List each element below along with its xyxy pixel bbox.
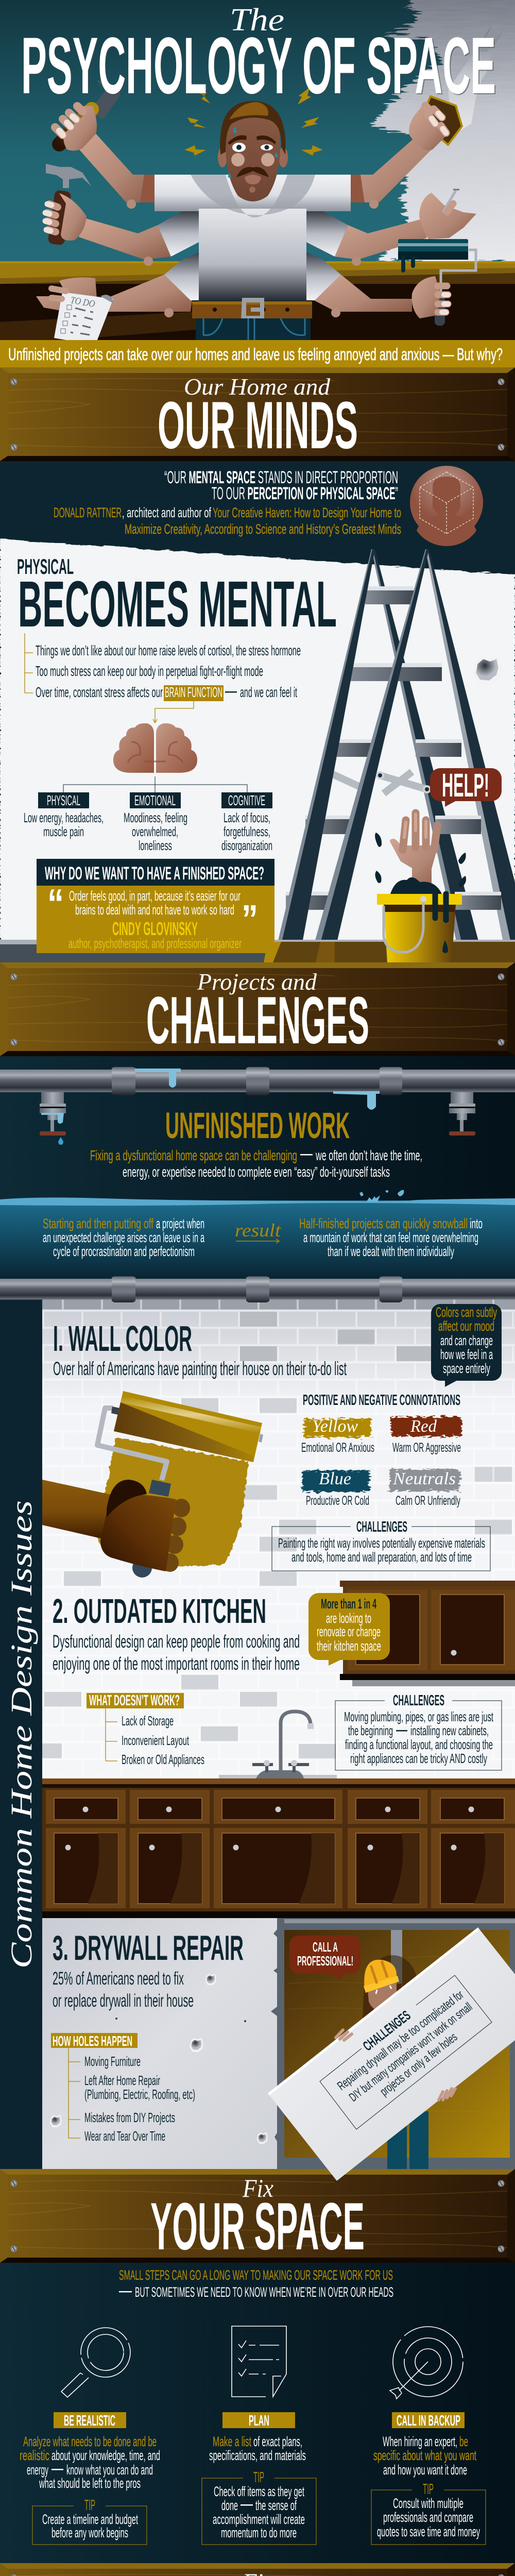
panel: cognitive symptoms: disorganization xyxy=(221,838,272,853)
tip box: the sense of xyxy=(255,2498,297,2513)
swatch: yellow: Yellow xyxy=(312,1417,358,1436)
panel: workbench and floor xyxy=(0,261,515,340)
panel: what doesn't work: Inconvenient Layout xyxy=(122,1733,189,1748)
illustration: ladder xyxy=(273,549,515,962)
step: be realistic xyxy=(20,2328,160,2545)
banner: projects and challenges xyxy=(0,962,515,1058)
panel: emotional symptoms: Moodiness, feeling xyxy=(124,810,187,825)
step: be realistic: about your knowledge, time, and xyxy=(52,2448,160,2463)
callout: call a professional: PROFESSIONAL! xyxy=(297,1953,353,1969)
arrow: result: result xyxy=(235,1220,281,1241)
illustration: to-do list hand: TO DO xyxy=(70,295,96,310)
jeans xyxy=(196,318,311,340)
swatch: yellow: Emotional OR Anxious xyxy=(301,1440,374,1455)
panel: why finished space: WHY DO WE WANT TO HAVE A FINISHED SPACE? xyxy=(45,863,264,884)
panel: drywall repair xyxy=(42,1918,277,2171)
text: right column: into xyxy=(470,1216,483,1231)
swatch: red: Warm OR Aggressive xyxy=(392,1440,461,1455)
illustration: middle left arm with hammer xyxy=(45,164,171,266)
list: stress effects: Over time, constant stress affects our xyxy=(36,684,163,700)
icon: checklist xyxy=(232,2326,286,2397)
swatch: red: Red xyxy=(410,1417,437,1436)
panel: water xyxy=(0,1190,515,1280)
text: drywall stat: 25% of Americans need to fix xyxy=(53,1969,184,1989)
icon: holes in drywall xyxy=(50,1974,268,2144)
tip box xyxy=(32,2497,147,2545)
illustration: upper right arm with saw xyxy=(351,25,502,209)
swatch: neutrals xyxy=(390,1469,460,1508)
quote attribution xyxy=(54,505,401,537)
illustration: drywall board with challenges: CHALLENGES xyxy=(360,2008,414,2054)
tip box: TIP xyxy=(423,2481,434,2498)
swatch: red xyxy=(391,1417,461,1455)
text: drywall stat xyxy=(53,1969,194,2011)
panel: brick wall xyxy=(42,1299,515,1781)
illustration: paint roller hand xyxy=(314,239,476,326)
panel: what doesn't work: WHAT DOESN’T WORK? xyxy=(89,1692,180,1709)
panel: what doesn't work xyxy=(87,1692,204,1767)
text: intro: Fixing a dysfunctional home space can be challenging xyxy=(90,1147,297,1163)
list: how holes happen: HOW HOLES HAPPEN xyxy=(53,2033,132,2049)
panel: kitchen challenges xyxy=(335,1692,502,1770)
painted wall patch xyxy=(95,1437,248,1566)
panel: why finished space: brains to deal with and not have to work so hard xyxy=(75,902,234,918)
panel: kitchen challenges: the beginning xyxy=(348,1723,393,1738)
callout: more than 1 in 4: More than 1 in 4 xyxy=(321,1596,376,1612)
icon: head in a cube xyxy=(410,466,483,546)
banner: fix your mind xyxy=(0,2563,515,2576)
list: how holes happen: Wear and Tear Over Time xyxy=(84,2128,165,2144)
step: plan: PLAN xyxy=(249,2413,269,2429)
callout: more than 1 in 4 xyxy=(308,1593,390,1666)
text: left column: Starting and then putting off xyxy=(43,1216,153,1231)
arm xyxy=(42,1480,113,1539)
step: call in backup xyxy=(371,2327,486,2545)
quote attribution: , architect and author of xyxy=(122,505,211,520)
text: left column: cycle of procrastination and perfectionism xyxy=(53,1244,195,1259)
illustration: paint roller on wall xyxy=(42,1391,263,1578)
icon: magnifying glass xyxy=(61,2328,130,2397)
panel: physical symptoms xyxy=(24,792,104,839)
panel: wall color challenges xyxy=(272,1519,490,1571)
step: call in backup: be xyxy=(459,2434,468,2449)
illustration: drywall board with challenges: projects or only a few holes xyxy=(377,2030,460,2099)
list: how holes happen xyxy=(51,2033,195,2144)
swatch: blue: Productive OR Cold xyxy=(306,1494,369,1508)
step: be realistic: realistic xyxy=(20,2448,49,2463)
list: how holes happen: Left After Home Repair xyxy=(84,2073,160,2088)
panel: cognitive symptoms: forgetfulness, xyxy=(224,824,270,839)
step: plan: specifications, and materials xyxy=(209,2448,306,2463)
illustration: upper kitchen cabinet xyxy=(340,1581,515,1686)
illustration: faucet xyxy=(219,1711,337,1780)
text: small steps xyxy=(119,2267,393,2300)
text: left column xyxy=(43,1216,205,1259)
quote text xyxy=(164,468,398,503)
tip box: Create a timeline and budget xyxy=(42,2512,138,2527)
panel: subtitle bar xyxy=(0,340,515,368)
list: stress effects xyxy=(25,633,301,701)
arrow: brain function to brain xyxy=(153,701,194,723)
icon: target with arrow xyxy=(390,2327,463,2399)
illustration: man's head xyxy=(218,101,288,201)
icon: close quote: ” xyxy=(242,896,258,942)
panel: emotional symptoms: overwhelmed, xyxy=(132,824,178,839)
panel: baseboard xyxy=(0,940,515,963)
banner: our home and our minds: Our Home and xyxy=(184,374,331,400)
ladder brace xyxy=(330,772,427,793)
illustration: to-do list hand xyxy=(36,275,192,345)
illustration: stud wall xyxy=(271,1918,515,2171)
text: intro: we often don’t have the time, xyxy=(315,1147,422,1163)
callout: colors affect mood xyxy=(431,1304,502,1387)
panel: physical symptoms: muscle pain xyxy=(43,824,84,839)
step: be realistic: know what you can do and xyxy=(66,2462,153,2478)
list: how holes happen: (Plumbing, Electric, Roofing, etc) xyxy=(84,2087,195,2102)
callout: more than 1 in 4: renovate or change xyxy=(317,1624,381,1639)
panel: why finished space xyxy=(37,859,274,953)
banner: fix your space: Fix xyxy=(242,2174,273,2202)
panel: header background xyxy=(0,0,515,263)
tip box: before any work begins xyxy=(52,2525,128,2540)
panel: wall color challenges: CHALLENGES xyxy=(356,1519,407,1535)
heading: Physical: PHYSICAL xyxy=(17,554,74,579)
banner: our home and our minds xyxy=(0,367,515,463)
panel: common issues sidebar xyxy=(0,1298,42,2170)
text: right column xyxy=(299,1216,483,1259)
tip box xyxy=(371,2481,486,2545)
illustration: bottom pipe xyxy=(0,1276,515,1302)
list: stress effects: Too much stress can keep our body in perpetual fight-or-flight mode xyxy=(36,663,263,679)
panel: why finished space: author, psychotherapist, and professional organizer xyxy=(68,936,242,951)
text: left column: an unexpected challenge arises can leave us in a xyxy=(43,1230,205,1245)
illustration: right faucet xyxy=(449,1082,475,1136)
callout: help xyxy=(430,767,502,807)
illustration: upper left arm with wrench xyxy=(55,80,154,209)
tip box: momentum to do more xyxy=(221,2525,297,2540)
illustration: worker in hard hat xyxy=(359,1955,428,2171)
illustration: hand sinking in paint bucket xyxy=(375,813,466,962)
step: be realistic: energy xyxy=(27,2462,48,2478)
tip box: done xyxy=(221,2498,238,2513)
panel: common issues sidebar: Common Home Design Issues xyxy=(5,1500,38,1969)
roller head xyxy=(114,1391,262,1462)
list: how holes happen: Moving Furniture xyxy=(84,2054,141,2069)
icon: stress lightning bolts xyxy=(184,88,323,156)
panel: fix your space steps xyxy=(0,2263,515,2564)
chart: effects org lines xyxy=(63,776,247,792)
swatch: yellow xyxy=(301,1417,374,1455)
list: how holes happen: Mistakes from DIY Projects xyxy=(84,2110,175,2125)
tip box: accomplishment will create xyxy=(213,2512,305,2527)
panel: what doesn't work: Broken or Old Appliances xyxy=(122,1752,204,1767)
hands holding board xyxy=(336,2030,455,2100)
panel: cognitive symptoms: Lack of focus, xyxy=(224,810,270,825)
callout: call a professional: CALL A xyxy=(313,1939,338,1955)
tip box: Check off items as they get xyxy=(214,2484,304,2499)
banner: fix your space xyxy=(0,2169,515,2264)
step: be realistic: BE REALISTIC xyxy=(64,2413,115,2429)
panel: unfinished work xyxy=(0,1056,515,1201)
panel: color connotations xyxy=(301,1392,461,1508)
text: intro xyxy=(90,1147,422,1180)
panel: cognitive symptoms xyxy=(221,792,272,853)
list: stress effects: and we can feel it xyxy=(240,684,297,700)
panel: kitchen challenges: CHALLENGES xyxy=(393,1692,444,1709)
step: plan: Make a list xyxy=(213,2434,251,2449)
callout: more than 1 in 4: are looking to xyxy=(326,1611,371,1626)
illustration: lower kitchen cabinets xyxy=(42,1778,515,1918)
text: drywall stat: or replace drywall in their house xyxy=(53,1991,194,2011)
step: be realistic: Analyze what needs to be done and be xyxy=(23,2434,157,2449)
icon: open quote: “ xyxy=(47,880,64,926)
tip box: TIP xyxy=(84,2497,95,2514)
text: left column: a project when xyxy=(156,1216,204,1231)
fist xyxy=(100,1480,190,1572)
banner: projects and challenges: Projects and xyxy=(197,969,317,995)
panel: our minds dark quote area xyxy=(0,461,515,585)
panel: emotional symptoms: loneliness xyxy=(139,838,172,853)
panel: emotional symptoms: EMOTIONAL xyxy=(134,792,176,808)
illustration: stressed man torso xyxy=(154,175,351,340)
heading: outdated kitchen: 2. OUTDATED KITCHEN xyxy=(53,1592,266,1631)
panel: physical symptoms: PHYSICAL xyxy=(47,792,80,808)
text: kitchen description xyxy=(53,1632,300,1674)
panel: cognitive symptoms: COGNITIVE xyxy=(228,792,265,808)
callout: more than 1 in 4: their kitchen space xyxy=(317,1638,381,1654)
illustration: left faucet xyxy=(40,1082,66,1136)
swatch: neutrals: Neutrals xyxy=(392,1469,456,1488)
grip xyxy=(149,1480,171,1497)
step: plan xyxy=(202,2326,316,2545)
text: kitchen description: Dysfunctional design can keep people from cooking and xyxy=(53,1632,300,1652)
step: be realistic: what should be left to the pros xyxy=(39,2476,141,2491)
panel: emotional symptoms xyxy=(124,792,187,853)
illustration: drywall board with challenges xyxy=(268,1927,515,2181)
tip box xyxy=(202,2469,316,2545)
step: plan: of exact plans, xyxy=(253,2434,302,2449)
quote attribution: DONALD RATTNER xyxy=(54,505,122,520)
panel: why finished space: Order feels good, in part, because it’s easier for our xyxy=(69,888,241,904)
list: stress effects: BRAIN FUNCTION xyxy=(165,684,222,700)
belt xyxy=(192,298,312,321)
illustration: middle right arm holding a nail xyxy=(335,190,476,266)
heading: unfinished work: UNFINISHED WORK xyxy=(165,1106,350,1146)
heading: wall color: I. WALL COLOR xyxy=(53,1318,192,1359)
tip box: TIP xyxy=(253,2469,264,2486)
panel: physical becomes mental light area xyxy=(0,539,515,958)
text: kitchen description: enjoying one of the most important rooms in their home xyxy=(53,1654,300,1674)
panel: why finished space: CINDY GLOVINSKY xyxy=(112,918,198,939)
heading: drywall repair: 3. DRYWALL REPAIR xyxy=(53,1928,244,1968)
roller frame xyxy=(97,1408,167,1480)
illustration: top pipe xyxy=(0,1067,515,1095)
icon: brain xyxy=(113,723,197,773)
panel: physical symptoms: Low energy, headaches, xyxy=(24,810,104,825)
illustration: hole in wall xyxy=(473,654,502,685)
panel: what doesn't work: Lack of Storage xyxy=(122,1713,174,1728)
callout: call a professional xyxy=(289,1936,360,1979)
swatch: neutrals: Calm OR Unfriendly xyxy=(396,1494,460,1508)
title: The: The xyxy=(230,3,284,38)
swatch: blue xyxy=(302,1469,369,1508)
swatch: blue: Blue xyxy=(319,1469,351,1488)
illustration: water drips xyxy=(41,1069,380,1145)
